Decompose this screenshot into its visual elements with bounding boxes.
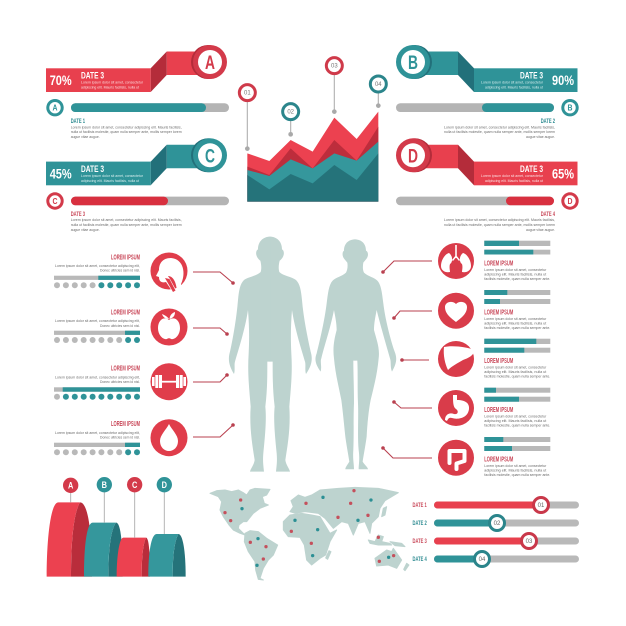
slider chart: 03 xyxy=(526,539,533,545)
panel: left item 3 dumbbell xyxy=(54,363,188,400)
panel: C banner: 45% xyxy=(50,166,72,181)
panel: C banner: adipiscing elit. Mauris facilisis, nulla ut xyxy=(81,178,140,183)
slider chart: DATE 2 xyxy=(412,521,427,527)
panel: C banner: C xyxy=(205,146,215,167)
panel: right item 1 lungs: facilisis molestie, quam nulla semper ante. xyxy=(484,276,550,281)
panel: right item 5 intestine: adipiscing elit. Mauris facilisis, nulla ut xyxy=(484,468,547,472)
panel: C progress bar: augue vitae augue. xyxy=(71,227,100,232)
panel: B banner: 90% xyxy=(552,73,574,88)
panel: right item 2 heart: LOREM IPSUM xyxy=(484,310,513,316)
panel: right item 2 heart: Lorem ipsum dolor sit amet, consectetur xyxy=(484,316,547,321)
panel: right item 3 liver: LOREM IPSUM xyxy=(484,358,513,365)
slider chart: 02 xyxy=(494,521,501,527)
chart: arched bars: A xyxy=(68,481,74,491)
panel: B progress bar: B xyxy=(568,104,573,113)
area chart: 04 xyxy=(375,82,382,88)
panel: right item 2 heart: facilisis molestie, quam nulla semper ante. xyxy=(484,325,550,330)
panel: right item 5 intestine: LOREM IPSUM xyxy=(484,456,513,464)
panel: B banner: B xyxy=(408,53,418,74)
panel: right item 1 lungs: Lorem ipsum dolor sit amet, consectetur xyxy=(484,267,547,272)
panel: D progress bar: Lorem ipsum dolor sit amet, consectetur adipiscing elit. Mauris facilisis, xyxy=(444,217,555,222)
panel: B progress bar: augue vitae augue. xyxy=(526,134,555,139)
panel: D banner: DATE 3 xyxy=(520,164,543,174)
area chart: 01 xyxy=(244,91,251,97)
panel: left item 1 throat xyxy=(54,252,188,292)
panel: right item 1 lungs: adipiscing elit. Mauris facilisis, nulla ut xyxy=(484,272,547,276)
panel: C progress bar: Lorem ipsum dolor sit amet, consectetur adipiscing elit. Mauris facilisis, xyxy=(71,217,182,222)
panel: C banner: DATE 3 xyxy=(81,164,104,174)
panel: left item 2 apple: Donec ultricies sem id nisl. xyxy=(100,323,140,328)
panel: D progress bar: nulla ut facilisis molestie, quam nulla semper ante, mollis semper lorem xyxy=(444,222,556,227)
slider chart: 01 xyxy=(538,503,545,509)
connector lines xyxy=(193,261,432,458)
panel: A progress bar: A xyxy=(52,104,58,113)
panel: A banner: DATE 3 xyxy=(81,70,104,80)
panel: left item 3 dumbbell: LOREM IPSUM xyxy=(111,366,140,372)
panel: D progress bar: D xyxy=(568,197,573,206)
panel: A progress bar: DATE 1 xyxy=(71,119,85,125)
panel: left item 2 apple: LOREM IPSUM xyxy=(111,310,140,316)
panel: D banner: adipiscing elit. Mauris facilisis, nulla ut xyxy=(485,178,544,183)
panel: B progress bar: DATE 2 xyxy=(541,119,555,125)
chart: arched bars: B xyxy=(102,480,107,490)
panel: right item 5 intestine: Lorem ipsum dolor sit amet, consectetur xyxy=(484,463,547,468)
panel: A banner: 70% xyxy=(50,73,72,88)
panel: right item 4 stomach: adipiscing elit. Mauris facilisis, nulla ut xyxy=(484,418,547,423)
area chart: 02 xyxy=(287,110,295,116)
slider chart: DATE 3 xyxy=(412,539,427,545)
panel: left item 2 apple: Lorem ipsum dolor sit amet, consectetur adipiscing elit, xyxy=(55,318,140,323)
figure: female body silhouette xyxy=(315,239,396,469)
panel: D progress bar xyxy=(396,192,579,232)
panel: C progress bar: nulla ut facilisis molestie, quam nulla semper ante, mollis semper lorem xyxy=(71,222,182,227)
panel: right item 3 liver: facilisis molestie, quam nulla semper ante. xyxy=(484,374,550,379)
panel: right item 1 lungs xyxy=(438,241,550,281)
panel: B banner xyxy=(396,45,578,92)
panel: left item 4 blood drop: LOREM IPSUM xyxy=(111,421,140,428)
figure: male body silhouette xyxy=(229,237,312,472)
panel: A banner: Lorem ipsum dolor sit amet, consectetur xyxy=(81,80,144,84)
panel: B banner: adipiscing elit. Mauris facilisis, nulla ut xyxy=(485,84,544,90)
panel: D banner xyxy=(396,138,578,185)
panel: C banner xyxy=(46,138,227,185)
area chart: 03 xyxy=(331,64,338,70)
panel: left item 4 blood drop: Lorem ipsum dolor sit amet, consectetur adipiscing elit, xyxy=(55,430,140,435)
panel: left item 1 throat: LOREM IPSUM xyxy=(111,254,140,262)
panel: D progress bar: augue vitae augue. xyxy=(526,227,555,232)
panel: B progress bar xyxy=(396,99,579,139)
panel: B banner: DATE 3 xyxy=(520,70,543,80)
slider chart: DATE 1 xyxy=(412,503,427,509)
panel: B progress bar: Lorem ipsum dolor sit amet, consectetur adipiscing elit. Mauris facilisis, xyxy=(444,124,555,130)
chart: arched bars xyxy=(47,477,186,577)
panel: A progress bar: augue vitae augue. xyxy=(71,134,100,139)
panel: right item 4 stomach: Lorem ipsum dolor sit amet, consectetur xyxy=(484,414,547,419)
panel: D banner: D xyxy=(408,146,418,167)
panel: D banner: Lorem ipsum dolor sit amet, consectetur xyxy=(481,173,544,178)
panel: right item 2 heart: adipiscing elit. Mauris facilisis, nulla ut xyxy=(484,320,547,326)
chart: arched bars: C xyxy=(132,480,138,490)
panel: A banner xyxy=(46,45,227,92)
panel: left item 2 apple xyxy=(54,308,188,346)
area chart xyxy=(239,58,386,202)
panel: A banner: A xyxy=(205,53,215,74)
panel: right item 3 liver: adipiscing elit. Mauris facilisis, nulla ut xyxy=(484,369,547,374)
panel: left item 3 dumbbell: Donec ultricies sem id nisl. xyxy=(100,379,140,384)
panel: C progress bar xyxy=(46,192,229,232)
panel: A progress bar: nulla ut facilisis molestie, quam nulla semper ante, mollis semper lorem xyxy=(71,129,182,134)
panel: D progress bar: DATE 4 xyxy=(541,212,555,218)
slider chart: 04 xyxy=(479,557,486,563)
slider chart: DATE 4 xyxy=(412,557,427,563)
panel: right item 1 lungs: LOREM IPSUM xyxy=(484,260,513,268)
slider chart xyxy=(412,498,579,566)
panel: right item 3 liver: Lorem ipsum dolor sit amet, consectetur xyxy=(484,365,547,370)
panel: right item 4 stomach: LOREM IPSUM xyxy=(484,407,513,414)
panel: left item 3 dumbbell: Lorem ipsum dolor sit amet, consectetur adipiscing elit, xyxy=(55,374,140,380)
panel: left item 1 throat: Lorem ipsum dolor sit amet, consectetur adipiscing elit, xyxy=(55,263,140,268)
panel: right item 4 stomach: facilisis molestie, quam nulla semper ante. xyxy=(484,423,550,428)
world map xyxy=(210,487,409,580)
panel: A progress bar xyxy=(46,99,229,139)
panel: left item 4 blood drop xyxy=(54,419,188,456)
panel: C banner: Lorem ipsum dolor sit amet, consectetur xyxy=(81,173,144,178)
panel: A progress bar: Lorem ipsum dolor sit amet, consectetur adipiscing elit. Mauris facilisis, xyxy=(71,124,182,130)
panel: right item 5 intestine: facilisis molestie, quam nulla semper ante. xyxy=(484,472,550,477)
panel: right item 5 intestine xyxy=(438,437,550,477)
panel: left item 4 blood drop: Donec ultricies sem id nisl. xyxy=(100,434,140,440)
panel: B progress bar: nulla ut facilisis molestie, quam nulla semper ante, mollis semper lorem xyxy=(444,129,556,134)
panel: left item 1 throat: Donec ultricies sem id nisl. xyxy=(100,268,140,272)
panel: C progress bar: C xyxy=(52,197,58,206)
panel: right item 4 stomach xyxy=(438,388,550,428)
panel: right item 3 liver xyxy=(438,339,550,379)
panel: A banner: adipiscing elit. Mauris facilisis, nulla ut xyxy=(81,84,140,90)
panel: D banner: 65% xyxy=(552,166,574,181)
chart: arched bars: D xyxy=(162,480,167,490)
panel: right item 2 heart xyxy=(438,290,550,330)
panel: C progress bar: DATE 3 xyxy=(71,212,85,218)
panel: B banner: Lorem ipsum dolor sit amet, consectetur xyxy=(481,80,544,84)
